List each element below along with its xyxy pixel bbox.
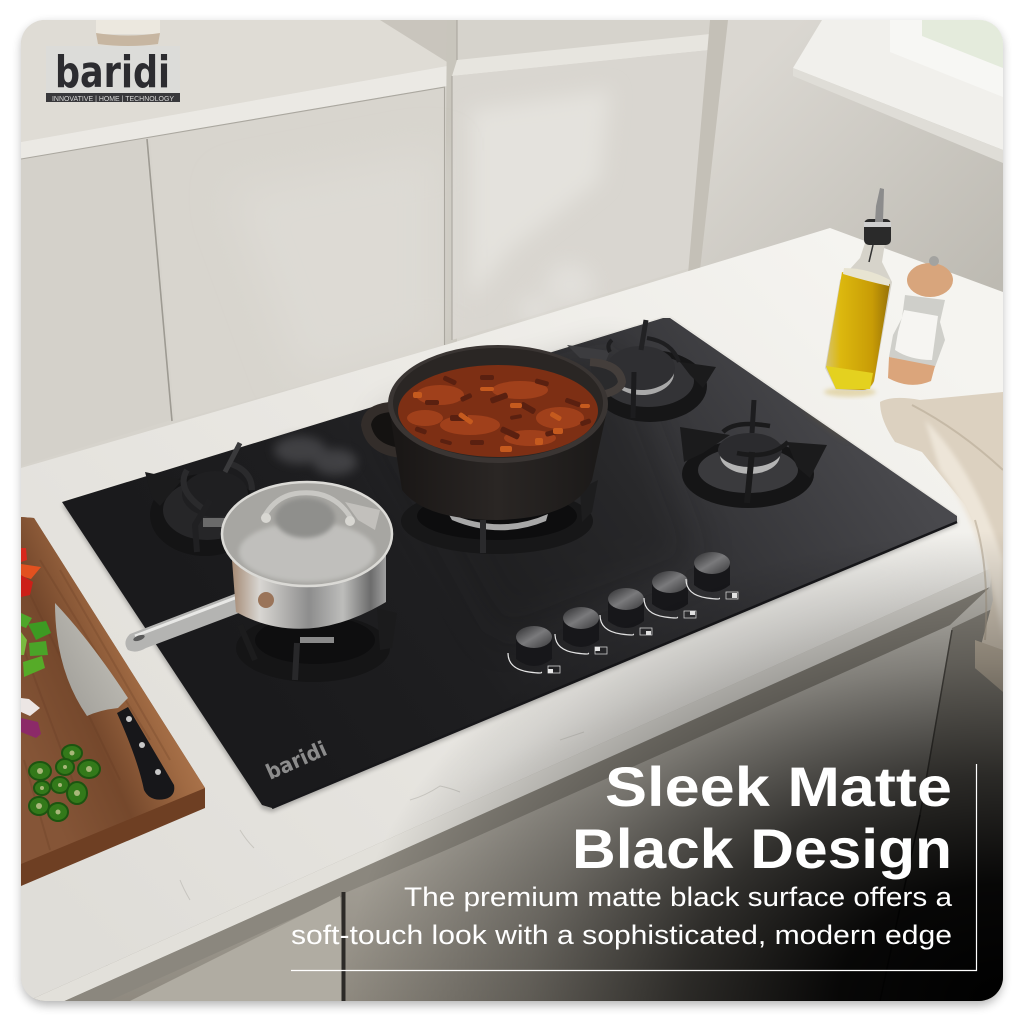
control knobs xyxy=(508,552,738,673)
description: The premium matte black surface offers a xyxy=(404,882,953,912)
burner: front right xyxy=(680,400,827,508)
steam on glass xyxy=(274,436,357,475)
counter front lip and lower cabinets xyxy=(21,568,1003,1012)
glass lid xyxy=(222,482,392,586)
linen towel xyxy=(880,392,1003,692)
pot handles xyxy=(366,407,402,453)
pepper mill xyxy=(888,256,953,385)
burner: front left xyxy=(255,619,390,681)
brand logo xyxy=(46,46,180,103)
knife xyxy=(55,603,174,800)
description: soft-touch look with a sophisticated, modern edge xyxy=(291,920,952,950)
description xyxy=(291,882,953,950)
oil bottle xyxy=(824,188,892,397)
corner rule xyxy=(291,764,976,970)
saucepan xyxy=(125,482,392,652)
pot rim xyxy=(388,345,608,463)
dutch oven with chilli xyxy=(366,345,622,520)
knob 2 xyxy=(555,607,607,654)
cutting board xyxy=(21,517,205,886)
burner: centre under pot xyxy=(401,480,598,554)
logo wordmark: baridi xyxy=(55,47,170,98)
logo tagline: INNOVATIVE | HOME | TECHNOLOGY xyxy=(52,96,174,103)
headline xyxy=(572,755,952,880)
burner: rear right xyxy=(567,320,716,422)
window and ledge xyxy=(793,20,1003,163)
knob 5 xyxy=(686,552,738,599)
jalapeno slices xyxy=(29,745,100,821)
steam on cabinet xyxy=(556,273,584,298)
knob 1 xyxy=(508,626,560,673)
pan body xyxy=(232,556,386,629)
canister xyxy=(96,20,160,46)
pan handle xyxy=(126,594,238,652)
chilli xyxy=(398,365,598,457)
printed brand mark: baridi xyxy=(262,737,331,785)
burner: rear left xyxy=(145,443,260,556)
chopped vegetables xyxy=(21,548,51,738)
upper cabinets xyxy=(21,20,728,466)
pot body xyxy=(391,415,606,520)
knob 3 xyxy=(600,588,652,635)
knob 4 xyxy=(644,571,696,618)
headline: Sleek Matte xyxy=(605,755,952,818)
countertop xyxy=(21,228,1003,1004)
cooktop glass xyxy=(62,317,957,812)
back wall xyxy=(764,118,1003,292)
dark gradient overlay xyxy=(376,546,1003,1001)
headline: Black Design xyxy=(572,817,952,880)
